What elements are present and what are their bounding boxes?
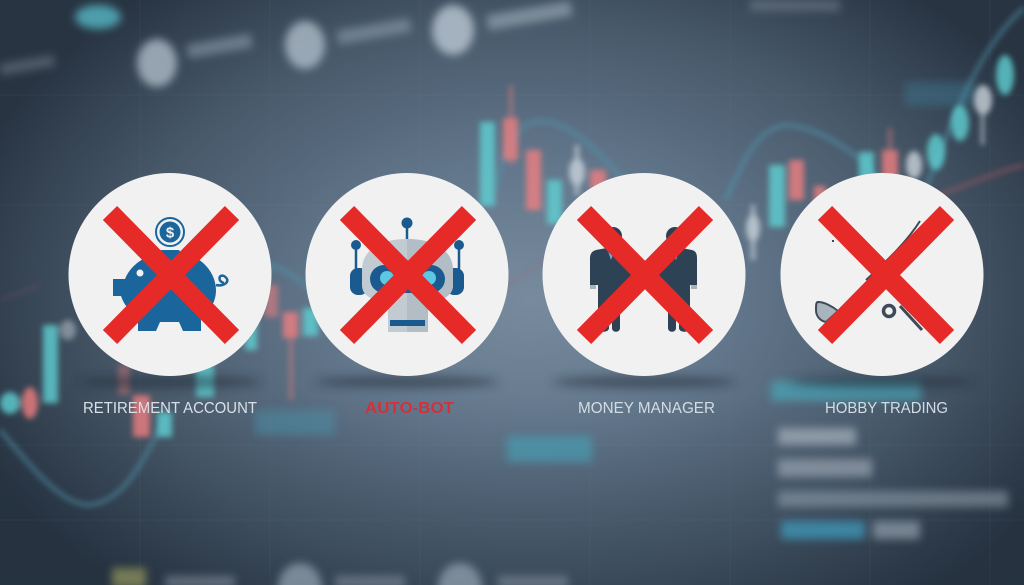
panel: retirement account (68, 173, 272, 388)
circle background (68, 173, 272, 376)
shadow under circle (552, 376, 736, 388)
label: auto-bot: AUTO-BOT (365, 400, 454, 417)
label: money manager: MONEY MANAGER (578, 400, 715, 417)
icon: red cross (347, 213, 469, 337)
icon: robot head (350, 218, 464, 332)
circle background (780, 173, 984, 376)
icon: red cross (584, 213, 706, 337)
blurred data boxes and list (112, 381, 1008, 585)
panel: money manager (542, 173, 746, 388)
icon: red cross (825, 213, 947, 337)
top blurred widgets (0, 0, 975, 106)
label: hobby trading: HOBBY TRADING (825, 400, 948, 417)
shadow under circle (315, 376, 499, 388)
panel: hobby trading (780, 173, 984, 388)
icon: piggy bank with coin: $ (166, 224, 175, 242)
shadow under circle (78, 376, 262, 388)
blurred candles (0, 55, 1014, 437)
label: retirement account: RETIREMENT ACCOUNT (83, 400, 257, 417)
panel: auto-bot (306, 173, 508, 388)
icon: two suited men (590, 227, 697, 332)
circle background (542, 173, 746, 376)
circle background (306, 173, 508, 376)
icon: red cross (110, 213, 232, 337)
icon: piggy bank with coin (113, 218, 227, 331)
shadow under circle (790, 376, 974, 388)
icon: golf club and cart (816, 221, 922, 330)
